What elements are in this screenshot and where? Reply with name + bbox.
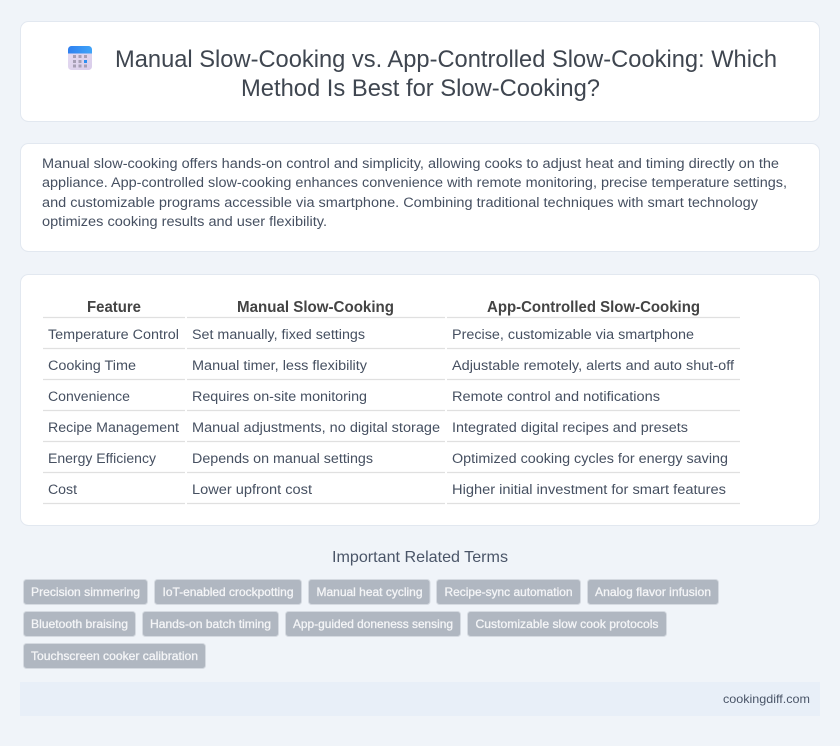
tag: recipe-sync automation xyxy=(436,580,580,604)
row: cooking time: Adjustable remotely, alerts and auto shut-off xyxy=(452,358,734,374)
row: cost xyxy=(48,482,726,498)
tag: hands-on batch timing xyxy=(142,612,278,636)
title xyxy=(115,46,777,102)
row: temperature control xyxy=(48,327,694,343)
tag: customizable slow cook protocols: Customizable slow cook protocols xyxy=(476,617,658,631)
row: recipe management xyxy=(48,420,688,436)
row: recipe management: Integrated digital recipes and presets xyxy=(452,420,688,436)
title: Method Is Best for Slow-Cooking? xyxy=(241,75,600,102)
text block: intro paragraph xyxy=(42,156,787,230)
text block: intro paragraph: appliance. App-controlled slow-cooking enhances convenience with remote monitoring, precise temperature settings, xyxy=(42,175,787,191)
panel: title header xyxy=(20,22,820,122)
tag: analog flavor infusion: Analog flavor infusion xyxy=(595,585,711,599)
tag: customizable slow cook protocols xyxy=(468,612,666,636)
tag: manual heat cycling: Manual heat cycling xyxy=(316,585,422,599)
row: recipe management: Recipe Management xyxy=(48,420,179,436)
row: cost: Higher initial investment for smart features xyxy=(452,482,726,498)
row: temperature control: Set manually, fixed settings xyxy=(192,327,365,343)
row: energy efficiency: Optimized cooking cycles for energy saving xyxy=(452,451,728,467)
row: convenience: Convenience xyxy=(48,389,130,405)
tag: analog flavor infusion xyxy=(588,580,718,604)
tag: manual heat cycling xyxy=(308,580,430,604)
tag: precision simmering: Precision simmering xyxy=(31,585,140,599)
row: convenience: Remote control and notifications xyxy=(452,389,660,405)
tag: touchscreen cooker calibration xyxy=(24,644,206,668)
text block: intro paragraph: Manual slow-cooking offers hands-on control and simplicity, allowing cooks to adjust heat and timing directly on the xyxy=(42,156,779,172)
tag: bluetooth braising: Bluetooth braising xyxy=(31,617,128,631)
row: energy efficiency xyxy=(48,451,728,467)
table header row: Manual Slow-Cooking xyxy=(237,299,394,316)
text block: intro paragraph: optimizes cooking results and user flexibility. xyxy=(42,214,327,230)
row: convenience: Requires on-site monitoring xyxy=(192,389,367,405)
row: cooking time: Manual timer, less flexibility xyxy=(192,358,368,374)
tag: app-guided doneness sensing: App-guided doneness sensing xyxy=(293,617,453,631)
panel: comparison table xyxy=(20,274,820,526)
tag: recipe-sync automation: Recipe-sync automation xyxy=(444,585,572,599)
tag: iot-enabled crockpotting xyxy=(154,580,302,604)
tag: iot-enabled crockpotting: IoT-enabled crockpotting xyxy=(162,585,294,599)
row: cooking time: Cooking Time xyxy=(48,358,136,374)
title: Manual Slow-Cooking vs. App-Controlled Slow-Cooking: Which xyxy=(115,46,777,73)
row: cost: Lower upfront cost xyxy=(192,482,312,498)
panel: introduction xyxy=(20,144,820,252)
row: recipe management: Manual adjustments, no digital storage xyxy=(192,420,440,436)
footer xyxy=(20,682,820,716)
row: energy efficiency: Depends on manual settings xyxy=(192,451,373,467)
row: temperature control: Temperature Control xyxy=(48,327,179,343)
table header row: App-Controlled Slow-Cooking xyxy=(487,299,700,316)
text block: intro paragraph: and customizable programs accessible via smartphone. Combining traditional techniques with smart technology xyxy=(42,195,759,211)
table header row: Feature xyxy=(87,299,141,316)
row: cooking time xyxy=(48,358,734,374)
table header row xyxy=(87,299,700,316)
row: cost: Cost xyxy=(48,482,77,498)
tag: precision simmering xyxy=(24,580,148,604)
tag list xyxy=(24,580,718,668)
icon: calendar xyxy=(68,46,92,70)
footer: cookingdiff.com xyxy=(723,692,810,706)
tag: hands-on batch timing: Hands-on batch timing xyxy=(150,617,271,631)
heading: important related terms: Important Related Terms xyxy=(332,549,508,566)
tag: bluetooth braising xyxy=(24,612,136,636)
row: temperature control: Precise, customizable via smartphone xyxy=(452,327,694,343)
row: convenience xyxy=(48,389,660,405)
tag: touchscreen cooker calibration: Touchscreen cooker calibration xyxy=(31,649,198,663)
tag: app-guided doneness sensing xyxy=(286,612,460,636)
row: energy efficiency: Energy Efficiency xyxy=(48,451,157,467)
